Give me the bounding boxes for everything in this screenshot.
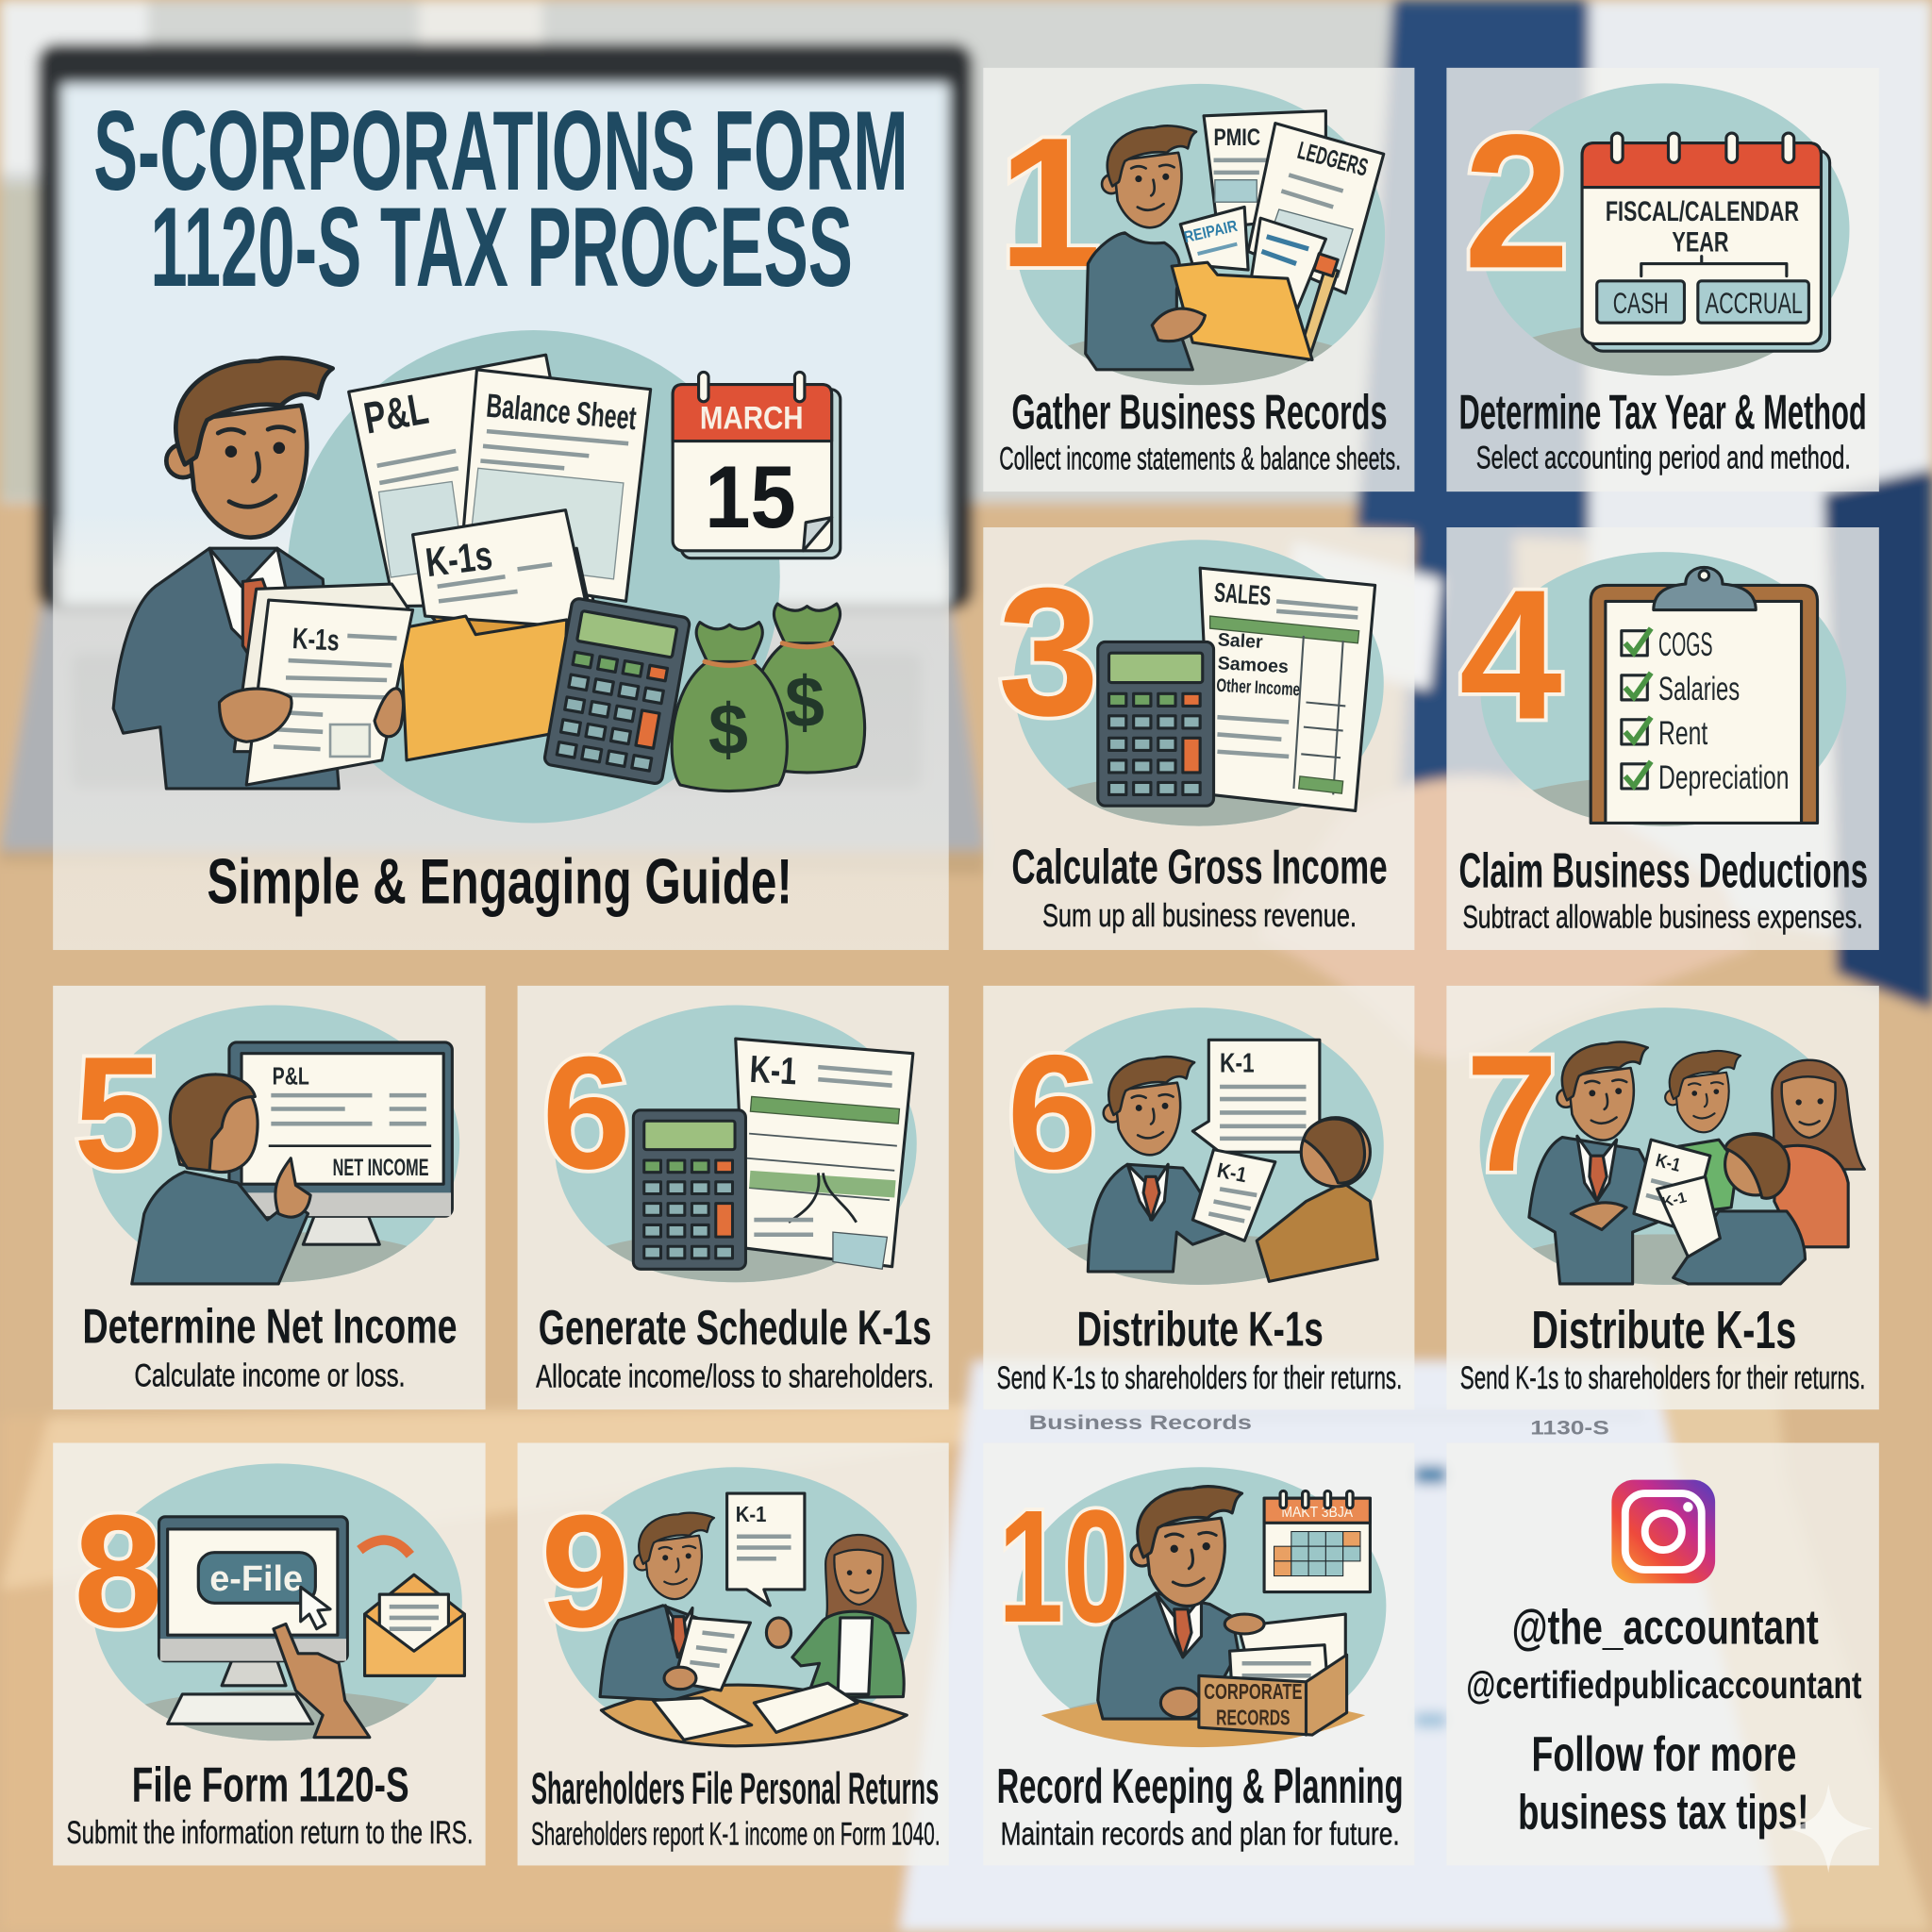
number 10: 10 [998,1476,1128,1656]
calendar: fiscal or calendar year, cash or accrual: CASH [1613,287,1668,320]
person holding folder [1086,125,1312,370]
number 1: 1 [998,99,1101,306]
monitor with net income [229,1042,452,1244]
shareholder from behind [1657,1134,1805,1284]
document: balance sheet [459,370,651,601]
records: PMIC, ledgers and folder: LEDGERS [1294,136,1371,182]
accountant with K-1 papers [113,358,413,789]
sales document: Saler [1217,629,1264,653]
envelope [365,1574,464,1675]
monitor with net income: NET INCOME [333,1156,429,1181]
panel: social media follow [1446,1442,1879,1865]
panel: step 10 record keeping and planning [983,1442,1414,1865]
document: balance sheet: Balance Sheet [485,388,638,437]
round table [601,1685,907,1746]
woman shareholder [1768,1060,1865,1247]
K-1 papers [1634,1140,1710,1232]
clipboard checklist: Depreciation [1658,759,1789,796]
sales document [1200,568,1375,810]
woman gesturing [766,1535,909,1698]
speech bubble K-1 [727,1493,805,1606]
document: P&L: P&L [360,383,432,443]
calculator [1098,641,1214,806]
panel: step 6 generate schedule K-1s [518,986,949,1409]
step title: Calculate Gross Income [1011,840,1388,894]
accountant with K-1 papers: K-1s [291,622,341,658]
icon: sparkle watermark [1784,1784,1873,1873]
recipient from behind [1257,1118,1377,1281]
sales document: SALES [1213,577,1272,612]
clipboard checklist [1591,567,1818,823]
step title: Gather Business Records [1011,386,1388,441]
money bags: $ [708,690,748,770]
computer with e-File button: e-File [209,1559,303,1599]
step title: Generate Schedule K-1s [539,1301,931,1356]
folder front [400,616,567,760]
step description: Submit the information return to the IRS. [67,1815,474,1851]
advisor in suit [1529,1042,1657,1284]
step description: Sum up all business revenue. [1042,898,1357,934]
planning calendar: MAKT 3BJA [1281,1505,1354,1521]
number 3: 3 [998,550,1099,754]
calculator [543,597,691,785]
number 6: 6 [541,1023,631,1202]
background document heading: Business Records [1029,1412,1252,1434]
step description: Allocate income/loss to shareholders. [536,1359,934,1395]
step title: Distribute K-1s [1532,1300,1796,1359]
step description: Collect income statements & balance sheets. [999,441,1401,477]
schedule K-1 document [736,1039,913,1269]
step title: Determine Net Income [83,1300,458,1355]
panel: hero title on laptop [53,0,949,950]
panel: step 7 distribute K-1s [1446,986,1879,1409]
document: P&L [349,355,594,607]
clipboard checklist: COGS [1658,626,1713,663]
person pointing at screen [132,1074,310,1284]
calendar: fiscal or calendar year, cash or accrual: ACCRUAL [1706,287,1803,320]
panel: step 8 file form 1120-S [53,1442,486,1865]
shareholder in green [1665,1051,1740,1214]
accountant filing records [1098,1487,1345,1719]
corporate records box: CORPORATE [1204,1679,1303,1704]
calendar: March 15: MARCH [700,401,804,437]
step title: Record Keeping & Planning [997,1759,1404,1814]
step description: Shareholders report K-1 income on Form 1040. [531,1816,941,1852]
calendar: March 15 [673,372,841,558]
K-1 paper: K-1 [1215,1158,1249,1187]
computer with e-File button [158,1517,347,1686]
number 8: 8 [74,1481,163,1660]
calculator [633,1110,745,1269]
money bags: $ [785,663,824,743]
arrow to envelope [359,1541,410,1555]
advisor handing over K-1 [1088,1057,1227,1272]
speech bubble K-1: K-1 [736,1502,766,1526]
number 5: 5 [74,1023,163,1202]
document: K-1s: K-1s [424,533,494,586]
K-1 papers: K-1 [1654,1150,1683,1176]
corporate records box: RECORDS [1216,1706,1291,1730]
panel: step 3 calculate gross income [983,527,1414,950]
folder back [431,548,596,690]
shareholder from behind: K-1 [1660,1190,1689,1211]
panel: step 5 determine net income [53,986,486,1409]
hero illustration backdrop [287,330,780,823]
table [1041,1695,1365,1747]
panel: step 9 shareholders file personal returns [518,1442,949,1865]
title: S-CORPORATIONS FORM [93,88,908,214]
step title: Distribute K-1s [1077,1302,1324,1357]
speech bubble with K-1 [1192,1040,1320,1152]
corporate records box [1199,1655,1347,1735]
planning calendar [1264,1491,1370,1592]
tagline: Simple & Engaging Guide! [207,846,792,917]
clipboard checklist: Rent [1658,715,1707,752]
hand clicking [274,1624,370,1738]
number 9: 9 [541,1481,630,1660]
monitor with net income: P&L [273,1061,309,1090]
sales document: Samoes [1217,653,1289,677]
calendar: fiscal or calendar year, cash or accrual: YEAR [1672,226,1729,258]
call to action: Follow for more [1532,1727,1796,1782]
panel: step 6 distribute K-1s [983,986,1414,1409]
background document form number: 1130-S [1530,1417,1609,1439]
records: PMIC, ledgers and folder: PMIC [1214,125,1260,151]
title [93,88,908,310]
money bags [672,604,865,791]
number 2: 2 [1464,94,1570,308]
records: PMIC, ledgers and folder [1180,111,1384,359]
step description: Send K-1s to shareholders for their returns. [997,1360,1402,1396]
clipboard checklist: Salaries [1658,671,1740,708]
number 7: 7 [1466,1021,1558,1207]
panel: step 1 gather business records [983,68,1414,491]
panel: step 2 determine tax year and method [1446,68,1879,491]
handle one: @the_accountant [1512,1600,1819,1655]
number 6: 6 [1007,1021,1097,1203]
call to action [1518,1727,1808,1840]
schedule K-1 document: K-1 [749,1047,798,1092]
keyboard [168,1694,313,1724]
man reading [600,1513,750,1700]
title: 1120-S TAX PROCESS [150,184,853,310]
calendar: fiscal or calendar year, cash or accrual [1582,133,1830,351]
call to action: business tax tips! [1518,1785,1808,1840]
panel: step 4 claim business deductions [1446,527,1879,950]
step title: Shareholders File Personal Returns [531,1763,939,1813]
step title: File Form 1120-S [132,1758,409,1813]
speech bubble with K-1: K-1 [1220,1048,1255,1078]
icon: instagram [1611,1480,1715,1583]
records: PMIC, ledgers and folder: REIPAIR [1182,217,1239,246]
papers on table [653,1683,858,1740]
document: K-1s [413,510,591,628]
number 4: 4 [1459,551,1562,758]
step description: Maintain records and plan for future. [1001,1816,1400,1852]
calendar: fiscal or calendar year, cash or accrual: FISCAL/CALENDAR [1606,196,1799,227]
calendar: March 15: 15 [705,447,796,546]
step description: Calculate income or loss. [134,1357,406,1393]
K-1 paper [1192,1150,1275,1241]
sales document: Other Income [1216,675,1301,700]
